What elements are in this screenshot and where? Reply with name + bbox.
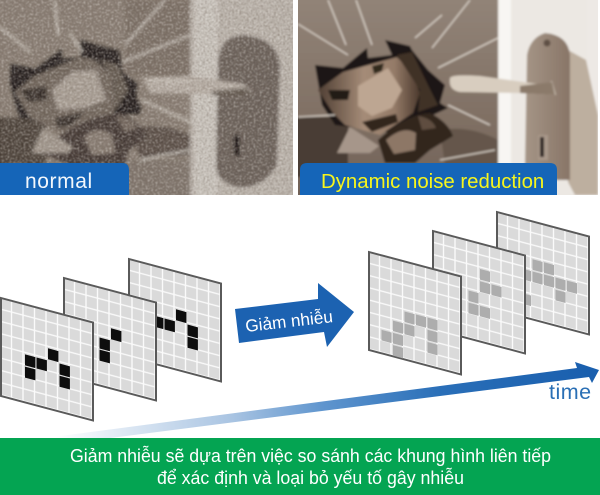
frame 1 original — [1, 298, 93, 420]
arrow: giảm nhiễu: Giảm nhiễu — [244, 306, 334, 336]
caption bar — [0, 438, 600, 495]
label: normal — [0, 163, 129, 195]
arrow: giảm nhiễu — [235, 283, 354, 347]
photo: dynamic noise reduction clean scene — [296, 0, 600, 200]
label: dynamic noise reduction — [300, 163, 557, 195]
frame 2 original — [64, 278, 156, 400]
label: time: time — [549, 380, 592, 404]
frame stack: denoised frames — [369, 212, 589, 374]
frame 3 original — [129, 259, 221, 381]
caption bar: để xác định và loại bỏ yếu tố gây nhiễu — [157, 467, 464, 488]
frame 1 denoised — [369, 252, 461, 374]
frame stack: original noisy frames — [1, 259, 221, 420]
label: dynamic noise reduction: Dynamic noise reduction — [321, 171, 544, 193]
frame 2 denoised — [433, 231, 525, 353]
photo: normal noisy scene — [0, 0, 297, 200]
label: normal: normal — [25, 170, 93, 193]
frame 3 denoised — [497, 212, 589, 334]
arrow: time axis — [45, 362, 599, 438]
caption bar: Giảm nhiễu sẽ dựa trên việc so sánh các khung hình liên tiếp — [70, 445, 551, 466]
